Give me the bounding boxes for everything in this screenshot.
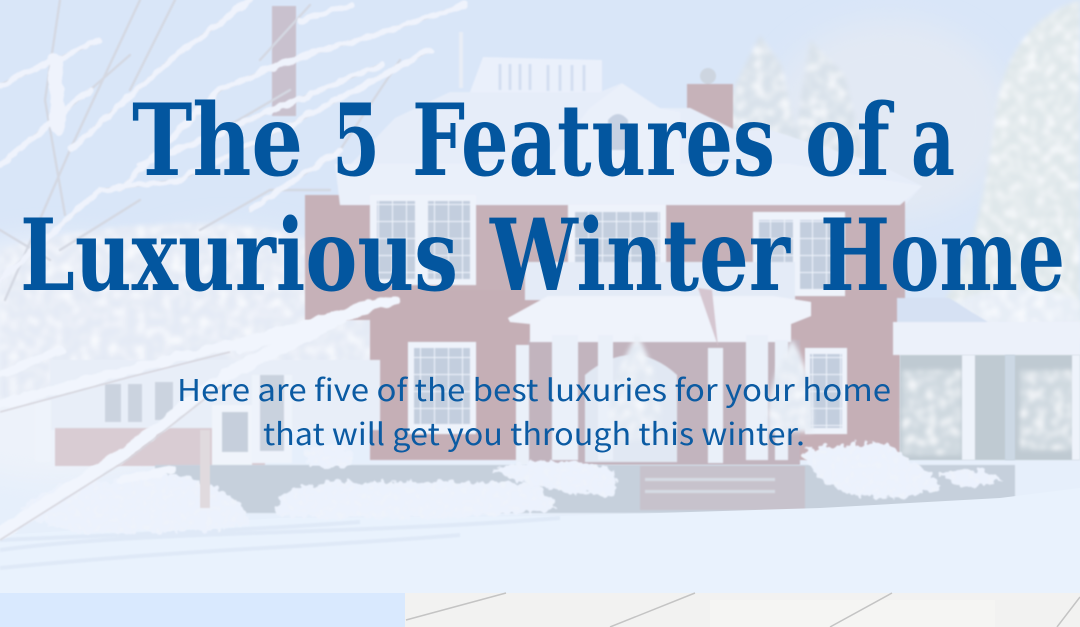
porch foliage — [902, 370, 1075, 455]
subtitle: Here are five of the best luxuries for your home — [177, 366, 891, 410]
terrace wall and steps — [155, 465, 1015, 513]
title line 2 — [20, 198, 1065, 314]
left wing — [35, 360, 380, 467]
title — [20, 83, 1065, 314]
right chimney — [687, 68, 733, 130]
snowy ground — [0, 488, 1080, 593]
evergreen trees behind house — [720, 35, 870, 205]
title line 2: Winter — [489, 198, 791, 314]
thick snowy limbs — [0, 300, 395, 533]
tree trunk — [200, 430, 210, 508]
title line 1: Features — [412, 83, 775, 199]
dormer window — [608, 114, 628, 150]
lower brick wall — [370, 290, 900, 460]
right snowy trees — [945, 0, 1080, 340]
dormer — [545, 84, 680, 165]
portico balcony — [525, 262, 795, 300]
marble tile panel — [405, 593, 1080, 627]
right wing — [893, 298, 1080, 460]
left chimney — [272, 6, 296, 116]
snow on branches — [0, 0, 465, 280]
title line 1: 5 — [332, 83, 380, 199]
blue panel — [0, 593, 405, 627]
title line 1: The — [132, 83, 303, 199]
title line 1: a — [911, 83, 955, 199]
rooftop balcony — [459, 32, 602, 94]
upper brick wall — [305, 195, 905, 320]
porch trees — [609, 335, 813, 440]
next section strip — [0, 593, 1080, 627]
subtitle: that will get you through this winter. — [263, 410, 805, 454]
lower windows — [408, 342, 847, 434]
title line 2: Luxurious — [20, 198, 458, 314]
title line 1 — [132, 83, 955, 199]
roof — [345, 83, 922, 205]
roof cornice — [335, 164, 922, 205]
flag — [698, 288, 718, 346]
foggy background trees — [0, 20, 1010, 480]
columns — [516, 335, 788, 465]
left frosted tree mass — [0, 224, 400, 400]
front door recess — [528, 340, 800, 465]
bare branches — [0, 0, 465, 300]
title line 1: of — [805, 83, 894, 199]
porch columns — [962, 355, 1080, 460]
snow-covered bushes — [20, 443, 1004, 533]
upper windows — [370, 195, 845, 296]
portico — [508, 296, 811, 342]
subtitle — [177, 366, 891, 454]
snowy tree branches, left — [0, 0, 465, 540]
sky — [0, 0, 1080, 320]
